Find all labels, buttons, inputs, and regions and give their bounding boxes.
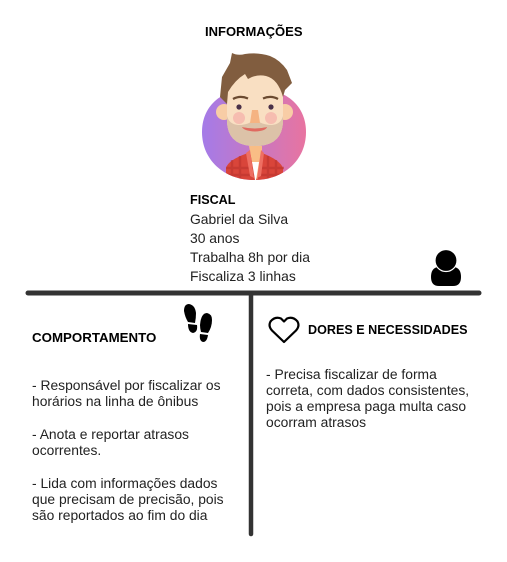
persona details: FISCAL [190, 192, 235, 206]
icon: footprints [184, 304, 212, 342]
text: dores items: ocorram atrasos [266, 414, 366, 430]
text: comportamento items: são reportados ao fim do dia [32, 507, 207, 523]
title: INFORMAÇÕES [205, 24, 302, 39]
text: comportamento items [32, 377, 224, 523]
text: dores items: - Precisa fiscalizar de forma [266, 366, 437, 382]
text: comportamento items: ocorrentes. [32, 442, 101, 458]
text: comportamento items: - Anota e reportar atrasos [32, 426, 189, 442]
text: comportamento items: horários na linha de ônibus [32, 393, 198, 409]
persona details: Fiscaliza 3 linhas [190, 268, 296, 284]
heading: comportamento: COMPORTAMENTO [32, 330, 156, 345]
icon: avatar [202, 53, 306, 180]
persona details: Trabalha 8h por dia [190, 248, 310, 264]
text: comportamento items: - Responsável por fiscalizar os [32, 377, 221, 393]
icon: heart [268, 316, 300, 344]
text: dores items: pois a empresa paga multa caso [266, 398, 466, 414]
heading: dores e necessidades: DORES E NECESSIDADES [308, 323, 468, 337]
text: dores items: correta, com dados consistentes, [266, 382, 469, 398]
persona details: Gabriel da Silva [190, 210, 288, 226]
text: dores items [266, 366, 469, 430]
persona details: 30 anos [190, 230, 239, 246]
persona details [190, 192, 310, 284]
panel: dores e necessidades [266, 316, 469, 430]
icon: person [431, 250, 461, 286]
panel: comportamento [32, 304, 224, 523]
text: comportamento items: que precisam de precisão, pois [32, 491, 224, 507]
text: comportamento items: - Lida com informações dados [32, 475, 217, 491]
